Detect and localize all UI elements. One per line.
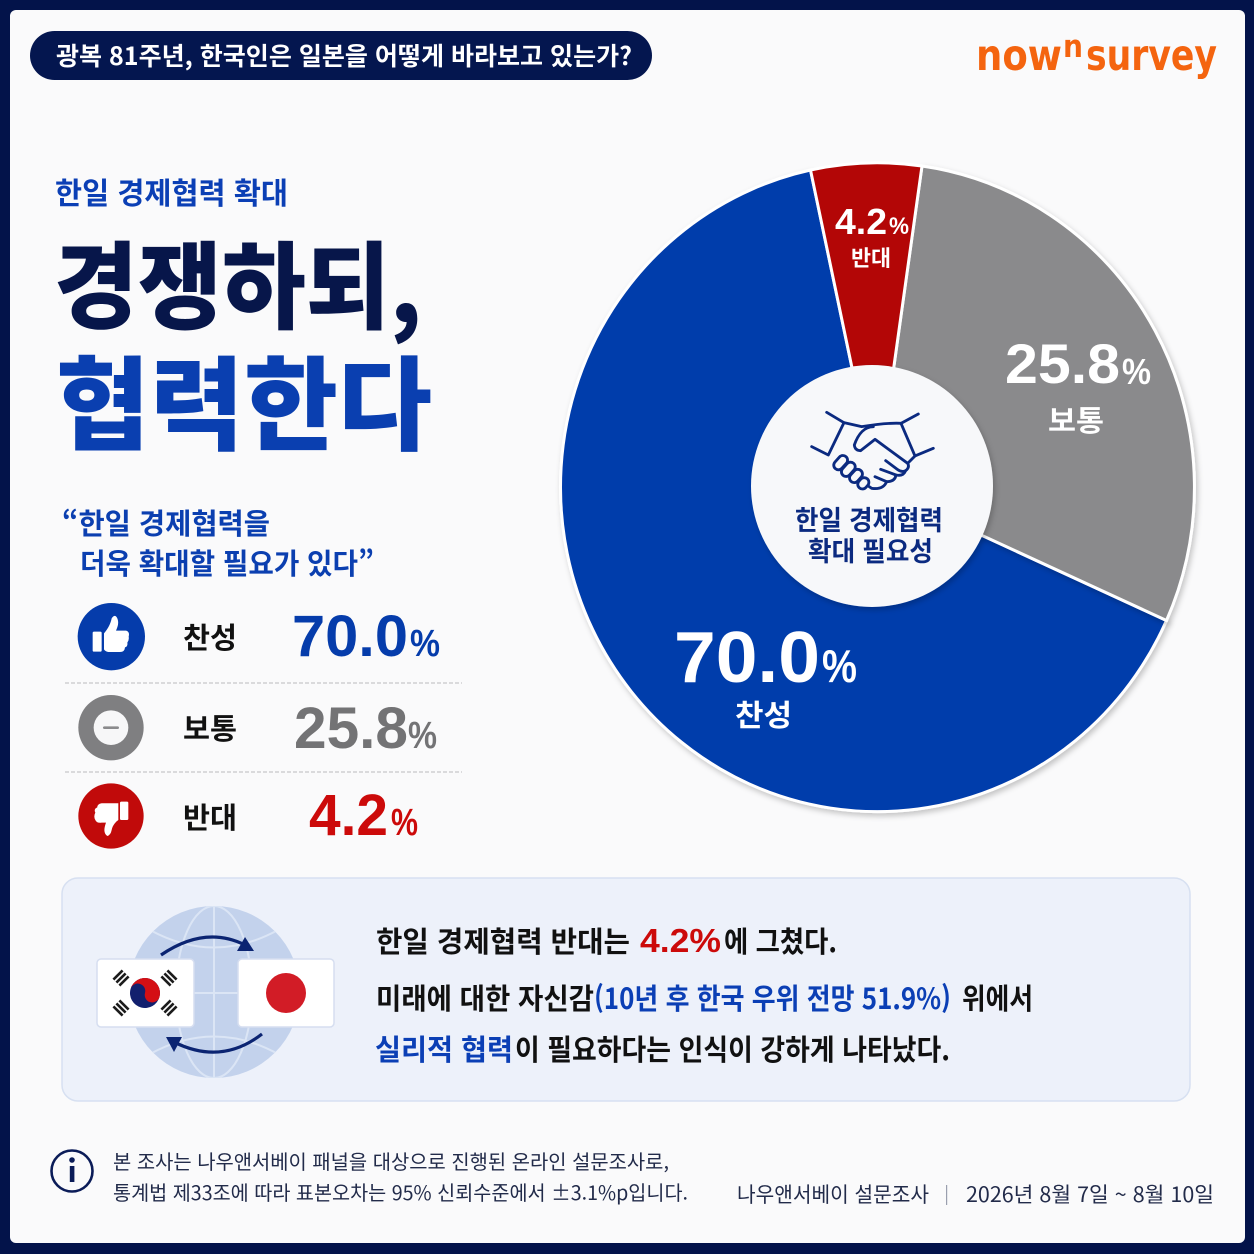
quote	[62, 501, 374, 583]
row: 반대: 반대	[183, 795, 237, 837]
summary text: 이 필요하다는 인식이 강하게 나타났다.	[515, 1027, 950, 1069]
row: 찬성: 70.0	[292, 604, 408, 669]
footnote	[113, 1146, 688, 1206]
footnote: 통계법 제33조에 따라 표본오차는 95% 신뢰수준에서 ±3.1%p입니다.	[113, 1177, 688, 1206]
row: 반대: %	[391, 802, 418, 844]
icon: globe	[128, 906, 300, 1078]
slice: 찬성 70.0%	[560, 170, 1166, 812]
icon: japanese flag	[238, 959, 334, 1027]
row: 반대	[78, 783, 418, 849]
panel: summary	[62, 878, 1190, 1101]
label: 보통: 보통	[1048, 398, 1104, 440]
headline: 협력한다	[56, 325, 432, 472]
label: 반대	[835, 201, 909, 273]
label: 보통: 25.8	[1005, 332, 1120, 395]
slice: 반대 4.2%	[810, 163, 922, 487]
headline	[54, 212, 432, 472]
title pill	[30, 31, 652, 80]
label: 찬성: %	[822, 640, 857, 692]
headline: 경쟁하되,	[54, 212, 422, 349]
icon: thumbs up	[78, 603, 145, 670]
logo: nownsurvey: now	[976, 31, 1062, 81]
logo: nownsurvey	[976, 29, 1217, 81]
center caption	[795, 499, 943, 569]
row: 반대: 4.2	[309, 783, 388, 848]
source and date: 나우앤서베이 설문조사	[737, 1179, 929, 1209]
row: 보통: 25.8	[294, 696, 408, 761]
center caption: 한일 경제협력	[795, 499, 943, 538]
logo: nownsurvey: survey	[1086, 31, 1217, 81]
row: 찬성: %	[410, 623, 440, 665]
icon: thumbs down	[78, 783, 144, 849]
summary text: 위에서	[962, 976, 1033, 1018]
summary text: 미래에 대한 자신감	[376, 976, 594, 1018]
summary text: 4.2%	[640, 922, 721, 959]
arrow: bottom	[166, 1034, 262, 1052]
row: 보통	[78, 695, 437, 761]
row: 찬성	[78, 603, 440, 670]
center circle	[751, 365, 993, 607]
row: 보통: 보통	[183, 706, 237, 748]
pie chart	[560, 163, 1194, 812]
source and date	[737, 1179, 1214, 1209]
slice: 보통 25.8%	[877, 166, 1194, 620]
source and date: 2026년 8월 7일 ~ 8월 10일	[966, 1179, 1214, 1209]
label: 찬성	[674, 618, 857, 735]
quote: 더욱 확대할 필요가 있다”	[80, 541, 374, 583]
label: 반대: 반대	[851, 241, 891, 273]
row: 찬성: 찬성	[183, 615, 237, 657]
label: 찬성: 찬성	[735, 691, 792, 735]
summary text	[375, 919, 1033, 1069]
icon: info	[52, 1150, 92, 1192]
icon: korean flag	[97, 959, 194, 1027]
summary text: 실리적 협력	[375, 1027, 513, 1069]
summary text: (10년 후 한국 우위 전망 51.9%)	[594, 976, 951, 1018]
label: 반대: 4.2	[835, 201, 887, 242]
title pill: 광복 81주년, 한국인은 일본을 어떻게 바라보고 있는가?	[56, 37, 632, 73]
arrow: top	[161, 937, 254, 955]
summary text: 한일 경제협력 반대는	[376, 919, 630, 961]
icon: handshake	[812, 412, 933, 491]
subheading: 한일 경제협력 확대	[55, 169, 288, 213]
label: 반대: %	[889, 213, 909, 240]
label: 보통	[1005, 332, 1151, 440]
row: 보통: %	[408, 715, 437, 757]
label: 찬성: 70.0	[674, 618, 820, 698]
label: 보통: %	[1122, 351, 1151, 392]
summary text: 에 그쳤다.	[724, 919, 837, 961]
icon: neutral	[78, 695, 144, 760]
center caption: 확대 필요성	[808, 530, 933, 569]
footnote: 본 조사는 나우앤서베이 패널을 대상으로 진행된 온라인 설문조사로,	[113, 1146, 669, 1175]
logo: nownsurvey: n	[1063, 29, 1083, 65]
quote: “한일 경제협력을	[62, 501, 270, 543]
